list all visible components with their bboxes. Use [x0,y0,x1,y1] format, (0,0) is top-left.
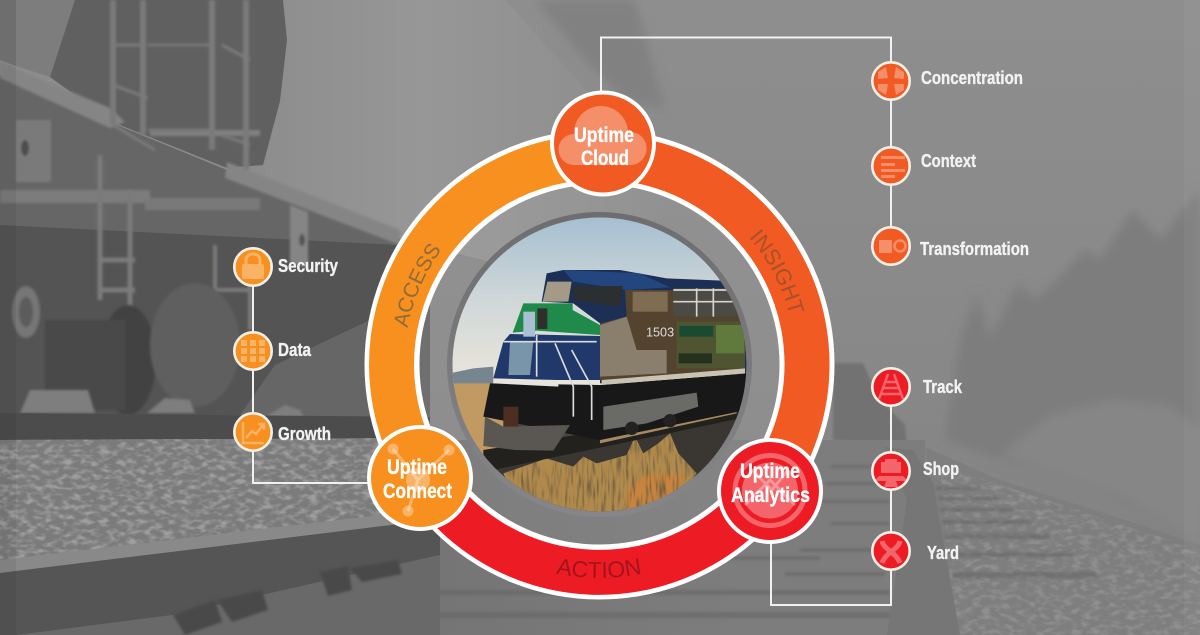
node: Uptime Analytics [719,440,821,542]
icon: analytics target [735,456,805,526]
label: Uptime Analytics: Analytics [731,483,810,507]
label: Uptime Analytics [731,459,810,507]
label: Uptime Cloud: Uptime [574,123,634,147]
icon: connected hub [388,444,454,516]
photo: windshield [573,286,623,307]
item: Track [872,368,963,406]
item: Transformation [872,227,1029,265]
icon: concentration [878,67,904,95]
photo: side panels [633,292,668,312]
icon: cloud [558,106,647,165]
item: Shop [872,452,959,490]
photo: distant hills [450,367,493,385]
photo: blue nose [493,334,600,380]
photo: white stripes [493,378,558,387]
background: misty trees [945,190,1200,540]
photo: loco upper dark blue [542,270,747,383]
background: sill and frame [0,62,400,268]
background: undercarriage shadow [0,225,400,415]
photo: brown body [600,290,747,380]
item: Concentration [872,62,1023,100]
item: Context [872,147,976,185]
photo: grey cab panel [600,317,667,377]
label: Uptime Cloud: Cloud [581,146,629,170]
label: Uptime Analytics: Uptime [740,459,800,483]
background: gravel patches [20,390,305,420]
icon: data grid [241,340,265,362]
photo: field [454,383,506,456]
connector lines [253,38,891,605]
label: Uptime Connect: Connect [383,479,452,503]
photo frame bezel [420,184,780,544]
background: foreground rail [884,447,960,635]
background: hopper car tank [227,0,660,300]
background: first rail [0,413,430,440]
background: left car tank [16,0,75,77]
background: ground and ties area [0,440,925,635]
icon: square to circle [879,240,906,253]
label: Context: Context [921,151,976,171]
label: Track: Track [923,377,963,397]
photo: gravel embankment [485,408,740,512]
photo: locomotive [452,218,746,512]
item: Data [234,332,312,370]
photo: handrails [503,335,597,420]
background: dark gap between cars [50,0,287,168]
icon: shop building [874,459,908,487]
photo: sky [452,218,746,387]
background: ground beneath rail [17,555,440,635]
label: Transformation: Transformation [920,239,1029,259]
background: second rail top [0,508,440,573]
photo: coupler [503,407,518,427]
photo: headlight panel [523,312,535,337]
background: rail clips [173,560,402,635]
label: Yard: Yard [927,543,959,563]
label: Uptime Connect: Uptime [387,455,447,479]
background: car frame zone [0,75,430,420]
ring label: access: ACCESS [394,244,440,328]
photo: underframe [483,373,747,440]
label: Uptime Cloud [574,123,634,170]
photo: tall grass [503,433,697,520]
ring segment: action [424,476,766,572]
item: Security [234,248,338,286]
icon: growth chart [243,422,264,443]
item: Growth [234,413,331,451]
background: wheels [12,283,240,415]
background: distant train [833,363,907,447]
label: Uptime Connect [383,455,452,503]
photo: rails [483,408,740,470]
node: Uptime Cloud [552,92,654,194]
ring segment: insight [602,157,807,488]
label: Growth: Growth [278,424,331,444]
icon: padlock [242,254,264,279]
ring: outer white border [364,134,834,600]
photo: unit number: 1503 [646,326,674,340]
item: Yard [872,532,959,570]
background: railway ties [380,465,1097,618]
label: Concentration: Concentration [921,68,1023,88]
background: ballast stones [0,438,430,562]
photo: roof [563,270,670,290]
node: Uptime Connect [369,427,471,529]
label: Security: Security [278,256,338,276]
ring label: action: ACTION [556,558,640,578]
photo: cab light side [543,282,572,302]
background: tree behind car [535,0,665,110]
background: panel seam [0,0,16,635]
photo: green nose [513,303,600,335]
ring segment: access [392,157,602,476]
photo: truck [603,393,698,430]
label: Data: Data [278,340,312,360]
photo: plow [483,417,570,451]
ring label: insight: INSIGHT [750,229,804,312]
icon: text lines [881,156,905,178]
icon: track [879,374,903,399]
photo: green side panels [677,322,745,368]
background: second rail side [0,519,440,635]
icon: yard switch [882,541,900,563]
label: Shop: Shop [923,459,959,479]
background: car ladders [100,0,250,330]
